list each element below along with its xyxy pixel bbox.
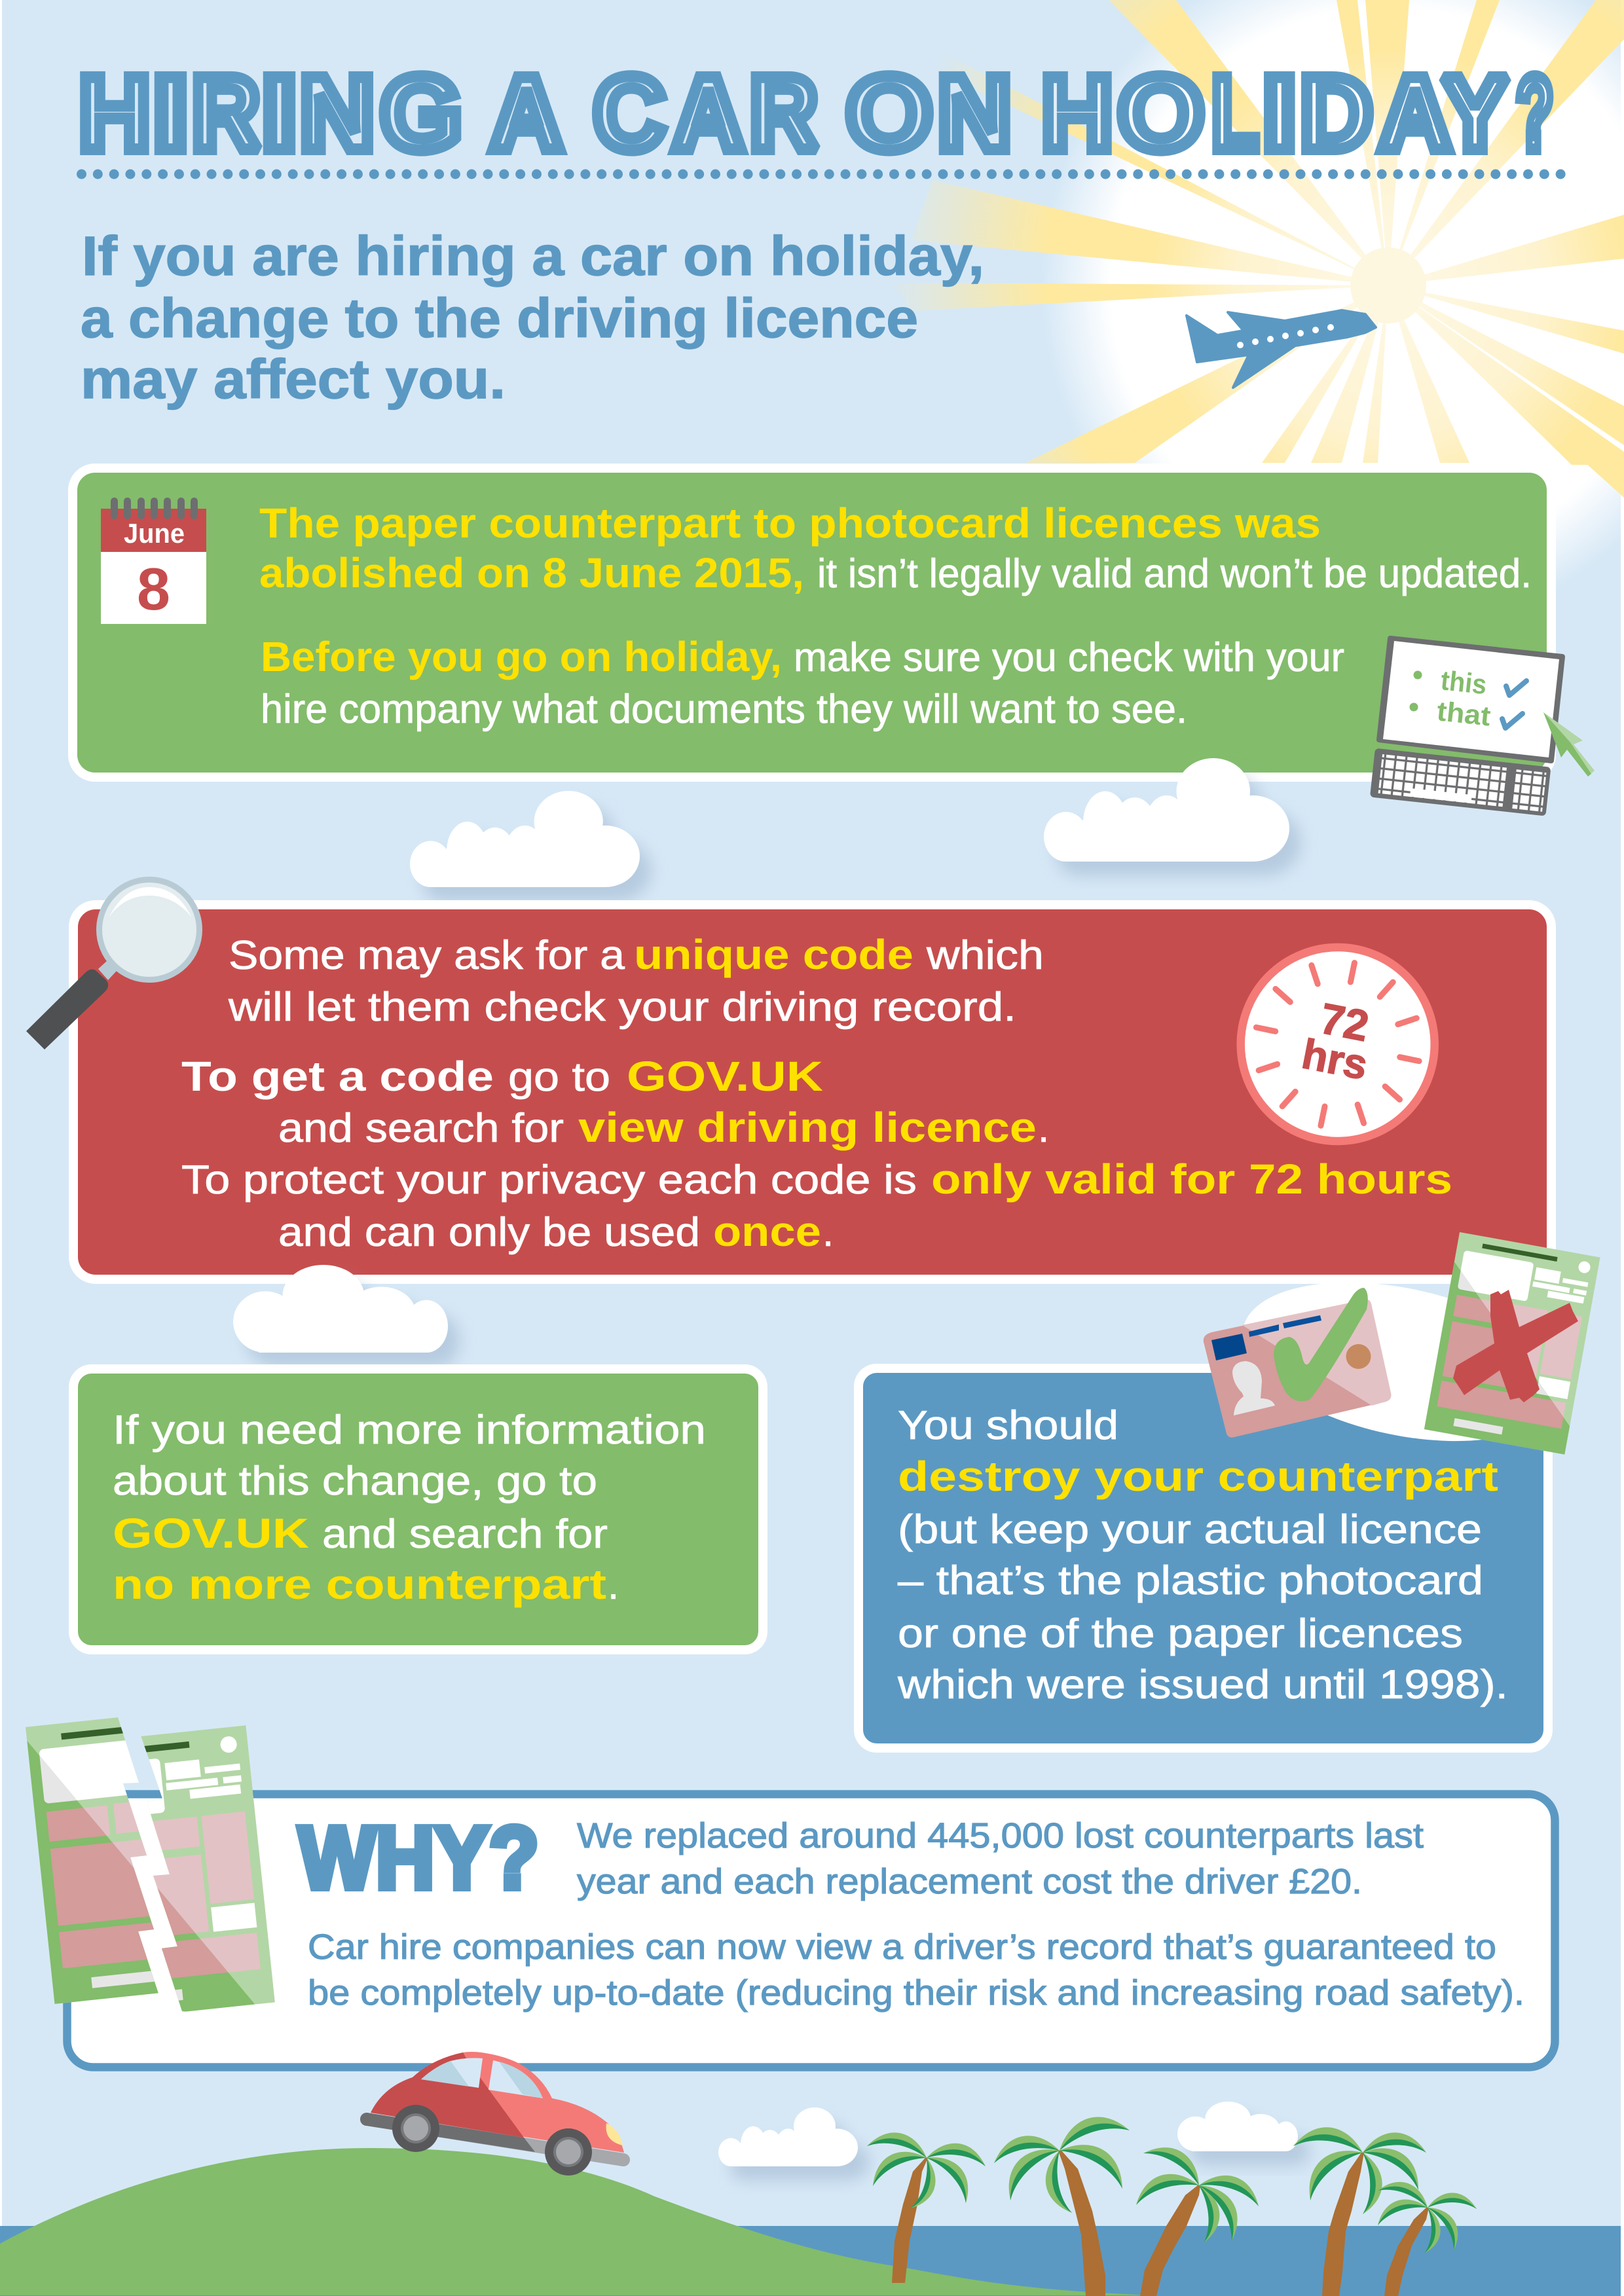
palm tree [1293,2124,1430,2296]
text block: replacement cost: We replaced around 445,000 lost counterparts last [577,1816,1424,1855]
title: C [593,54,665,172]
title: I [153,54,188,172]
title: R [750,54,818,172]
heading: why: WHY? [299,1808,539,1907]
text block: how to get a code: and search for [278,1106,564,1151]
title: A [673,54,744,172]
title: O [846,54,932,172]
text block: car hire companies: be completely up-to-date (reducing their risk and increasing road safety). [308,1973,1524,2013]
icon: 72 hour clock: 72 [1316,994,1373,1050]
title [79,54,1553,172]
text block: more information: . [608,1563,619,1608]
title: D [1300,54,1373,172]
title: A [1379,54,1451,172]
text block: unique code: unique code [634,931,913,978]
text block: privacy: once [713,1208,821,1255]
title: A [673,54,744,172]
title: I [153,54,188,172]
sea [0,2226,1621,2296]
text block: more information: GOV.UK [113,1510,309,1557]
cloud [233,1265,448,1353]
title: R [750,54,818,172]
panel: more information [73,1369,763,1650]
title: O [1118,54,1204,172]
text block: before you go: hire company what documents they will want to see. [261,687,1187,732]
palm tree [864,2127,988,2283]
text block: unique code: which [926,933,1044,978]
text block: destroy your counterpart: which were issued until 1998). [897,1662,1508,1707]
text block: privacy: only valid for 72 hours [931,1156,1452,1203]
text block: privacy: . [822,1210,834,1255]
title: R [192,54,260,172]
text block: destroy your counterpart: You should [898,1403,1118,1448]
title: G [380,54,462,172]
text block: unique code: Some may ask for a [229,933,625,978]
icon: laptop with checklist [1370,638,1595,816]
text block: more information [113,1408,706,1608]
text block: replacement cost: year and each replacement cost the driver £20. [577,1862,1362,1901]
title: N [300,54,375,172]
panel: destroy your counterpart [858,1368,1548,1748]
text block: how to get a code: go to [508,1055,610,1100]
icon: calendar [101,498,206,624]
text block: destroy your counterpart: (but keep your actual licence [898,1507,1482,1552]
icon: 72 hour clock: hrs [1299,1030,1371,1089]
title: A [490,54,563,172]
cloud [1177,2102,1298,2151]
text block: unique code [228,931,1044,1030]
icon: magnifying glass [26,880,199,1049]
cloud [1044,758,1289,862]
text block: unique code: will let them check your driving record. [228,985,1016,1030]
panel: paper counterpart abolished [73,468,1551,777]
title: ? [1516,54,1553,172]
title: H [1042,54,1113,172]
icon: photocard licence with tick [1204,1288,1391,1438]
text block: destroy your counterpart: or one of the paper licences [898,1611,1463,1656]
text block: before you go: make sure you check with your [794,635,1344,680]
palm tree [990,2108,1134,2296]
subtitle: If you are hiring a car on holiday, [82,225,984,287]
panel: why [67,1794,1555,2068]
subtitle: a change to the driving licence [81,287,918,349]
icon: 72 hour clock [1241,947,1435,1141]
icon: calendar: June [124,518,185,549]
title: A [490,54,563,172]
icon: white oval behind licences [1228,1256,1576,1467]
text block: more information: and search for [322,1512,608,1557]
icon: laptop with checklist: that [1435,695,1492,732]
palm tree [1372,2175,1477,2296]
text block: privacy [181,1156,1452,1255]
title: O [846,54,932,172]
title: L [1211,54,1259,172]
title: G [380,54,462,172]
title: N [938,54,1011,172]
title: ? [1516,54,1553,172]
cloud [410,791,640,887]
text block: privacy: and can only be used [278,1210,700,1255]
text block: more information: If you need more information [113,1408,706,1453]
icon: paper counterpart crossed out [1424,1232,1600,1455]
title: I [1263,54,1297,172]
text block: abolished notice: it isn’t legally valid and won’t be updated. [817,551,1532,596]
text block: destroy your counterpart: – that’s the plastic photocard [898,1558,1483,1603]
text block: destroy your counterpart [897,1403,1508,1707]
text block: how to get a code: GOV.UK [627,1053,823,1100]
text block: how to get a code [181,1053,1049,1151]
icon: laptop with checklist: this [1439,665,1488,700]
text block: abolished notice: The paper counterpart to photocard licences was [259,500,1321,547]
title: R [192,54,260,172]
title: N [938,54,1011,172]
title: L [1211,54,1259,172]
text block: privacy: To protect your privacy each code is [181,1157,917,1203]
text block: how to get a code: . [1038,1106,1049,1151]
title: N [300,54,375,172]
title: H [79,54,150,172]
icon: red car [360,2052,624,2176]
title: A [1379,54,1451,172]
text block: destroy your counterpart: destroy your counterpart [898,1453,1498,1500]
hill [0,2148,1153,2295]
text block: before you go: Before you go on holiday, [261,633,782,680]
icon: aeroplane [1187,310,1376,388]
subtitle: may affect you. [81,348,506,410]
text block: replacement cost [577,1816,1424,1901]
text block: more information: no more counterpart [113,1561,606,1608]
text block: car hire companies: Car hire companies can now view a driver’s record that’s guaranteed to [308,1927,1496,1967]
text block: more information: about this change, go to [113,1459,597,1504]
icon: torn paper counterpart [26,1706,275,2023]
icon: calendar: 8 [137,556,170,623]
palm tree [1130,2136,1265,2296]
title: C [593,54,665,172]
sun with rays [899,0,1624,572]
text block: abolished notice: abolished on 8 June 2015, [259,549,804,596]
text block: how to get a code: To get a code [181,1053,494,1100]
title: I [262,54,297,172]
subtitle [81,225,984,410]
cloud [718,2107,858,2166]
title: I [262,54,297,172]
title: H [79,54,150,172]
title: D [1300,54,1373,172]
text block: car hire companies [308,1927,1524,2013]
text block: how to get a code: view driving licence [578,1104,1037,1151]
text block: abolished notice [259,500,1532,596]
text block: before you go [261,633,1344,732]
title: Y [1442,54,1508,172]
panel: unique code [73,905,1551,1279]
title: Y [1442,54,1508,172]
title: H [1042,54,1113,172]
title: O [1118,54,1204,172]
title: I [1263,54,1297,172]
